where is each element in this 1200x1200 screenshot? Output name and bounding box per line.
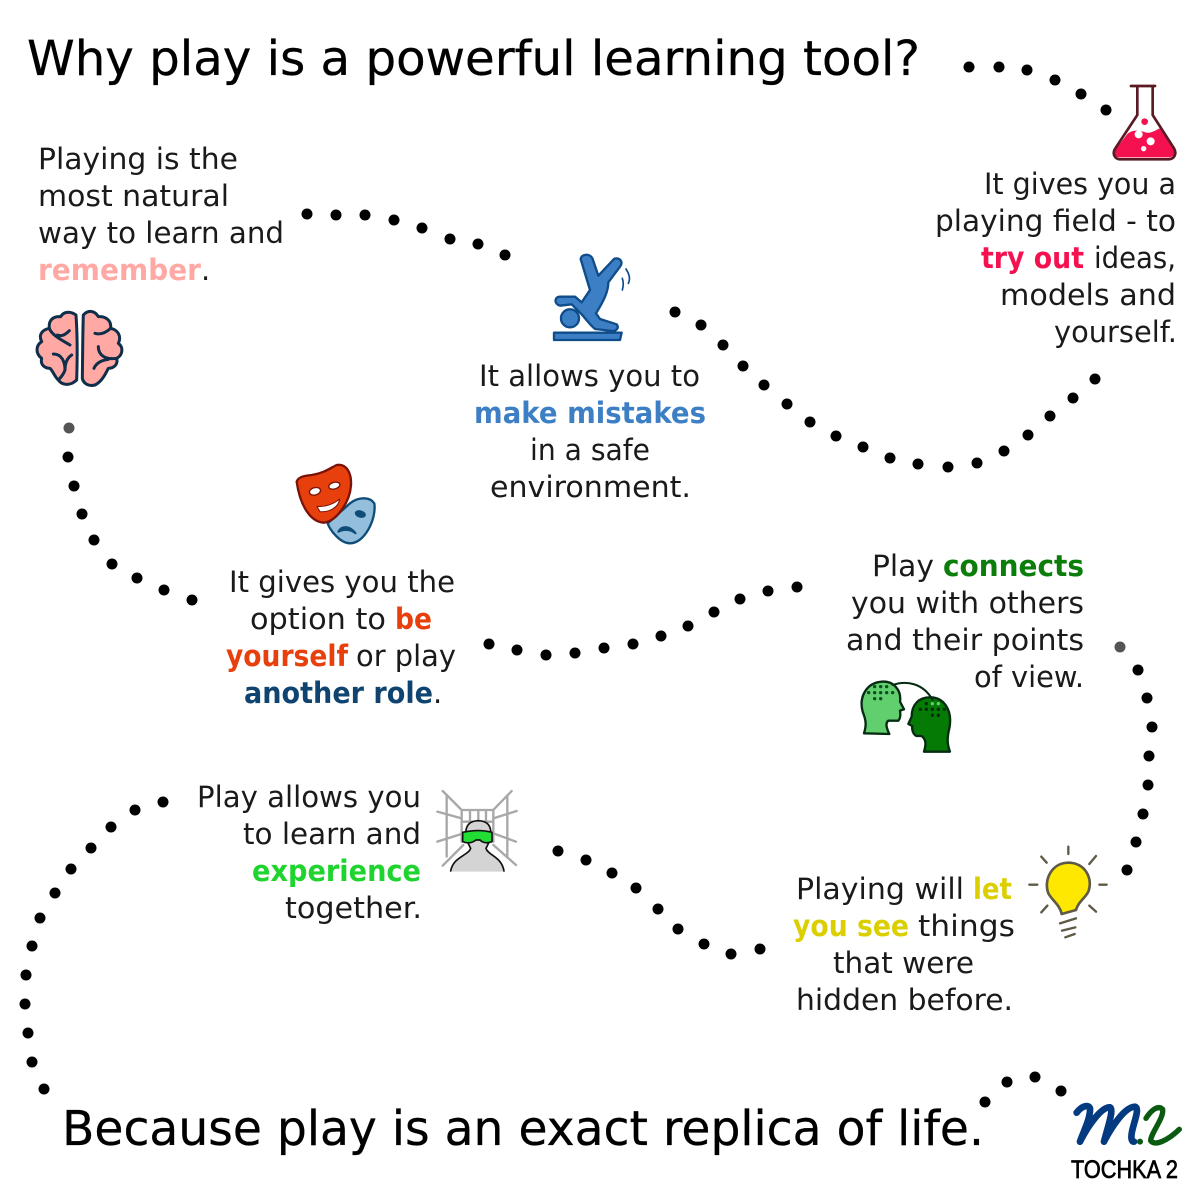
text block: let you see [793,872,1015,1017]
dotted path: masks text to connects text [484,582,802,660]
dotted path: brain to masks text [62,422,198,606]
text block: remember: way to learn and [38,216,284,250]
text block: try out: try out [981,241,1084,275]
icon: flask [1114,86,1175,159]
text block: try out: It gives you a [984,167,1176,201]
text block: be yourself: another role [244,676,433,710]
icon: light bulb [1029,847,1107,937]
dotted path: falling figure to playing field text [670,306,1100,472]
dotted path: experience text to conclusion [20,796,168,1094]
text block: try out: ideas, [1094,241,1176,275]
text block: try out: yourself. [1054,315,1177,349]
text block: be yourself: . [433,676,442,710]
text block: try out: models and [1000,278,1176,312]
text block: experience: experience [252,854,421,888]
text block: connects: you with others [851,586,1084,620]
dotted path: connects text to light bulb [1114,642,1158,876]
text block: connects: Play [872,549,934,583]
icon: brain [37,311,122,385]
text block: experience: to learn and [243,817,421,851]
text block: let you see: you see [793,909,909,943]
icon: theatre masks [297,465,375,543]
text block: connects: of view. [974,660,1084,694]
text block: let you see: things [918,909,1015,943]
icon: person in VR headset [437,791,517,872]
dotted path: conclusion to logo [980,1072,1066,1108]
text block: remember [38,142,284,287]
title: Why play is a powerful learning tool? [27,31,920,87]
dotted path: title to flask [964,62,1112,116]
text block: be yourself: be [395,602,432,636]
text block: make mistakes: in a safe [530,433,650,467]
text block: remember: . [201,253,210,287]
dotted path: bulb text to VR icon [552,846,766,960]
text block: connects: connects [943,549,1084,583]
text block: be yourself [226,565,456,710]
text block: be yourself: yourself [226,639,348,673]
logo mark [1077,1106,1179,1145]
text block: let you see: hidden before. [796,983,1013,1017]
conclusion: Because play is an exact replica of life. [62,1101,984,1157]
text block: remember: Playing is the [38,142,238,176]
text block: let you see: Playing will [796,872,964,906]
text block: make mistakes: environment. [490,470,691,504]
text block: be yourself: or play [356,639,456,673]
text block: make mistakes [474,359,706,504]
text block: connects [846,549,1084,694]
logo text: TOCHKA 2 [1071,1156,1178,1184]
text block: let you see: let [973,872,1012,906]
text block: connects: and their points [846,623,1084,657]
text block: be yourself: It gives you the [229,565,455,599]
text block: experience: Play allows you [197,780,421,814]
icon: two heads connected [862,682,950,752]
icon: falling figure [554,255,629,340]
text block: make mistakes: make mistakes [474,396,706,430]
logo: Tochka 2 [1071,1106,1179,1184]
dotted path: brain text to falling figure [302,208,510,260]
text block: try out: playing field - to [935,204,1176,238]
text block: experience: together. [285,891,422,925]
text block: make mistakes: It allows you to [479,359,700,393]
text block: remember: most natural [38,179,229,213]
text block: remember: remember [38,253,202,287]
text block: be yourself: option to [250,602,386,636]
text block: let you see: that were [833,946,974,980]
text block: experience [197,780,422,925]
text block: try out [935,167,1177,349]
